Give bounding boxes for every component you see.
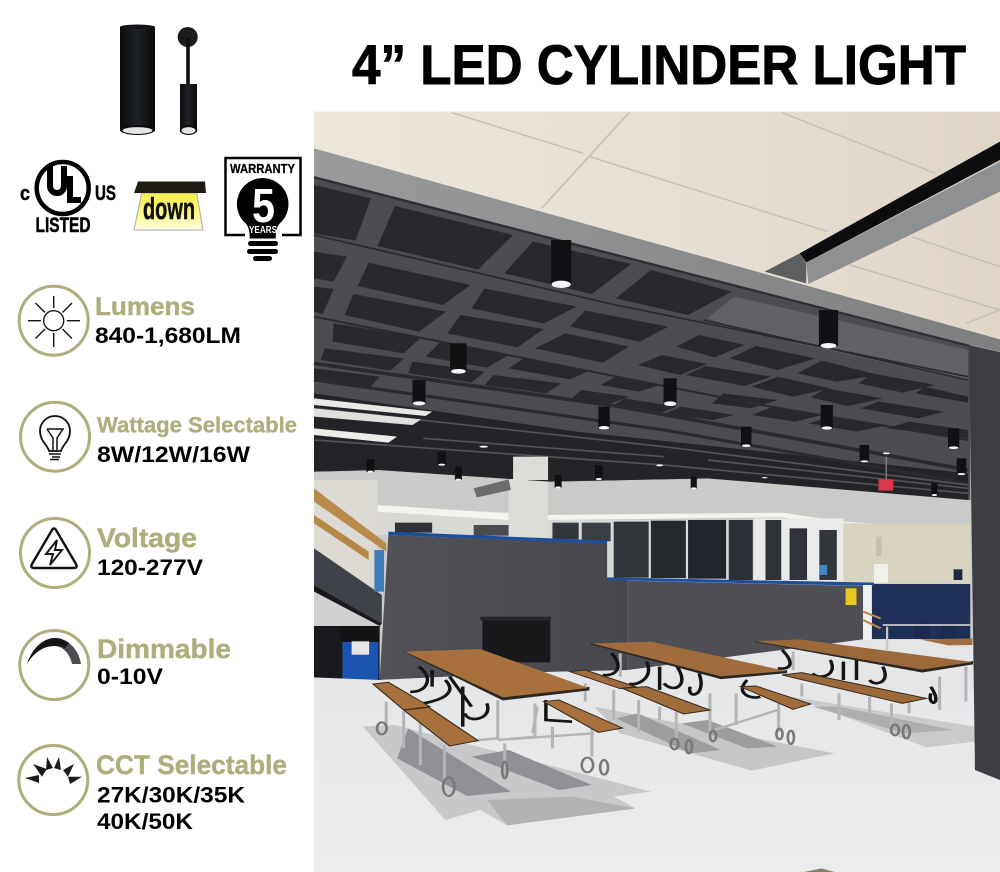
- floor shadows: [363, 725, 651, 825]
- table tops: [405, 652, 589, 700]
- spec: CCT: 40K/50K: [97, 809, 193, 834]
- warranty badge: [226, 158, 300, 261]
- lighter ribs in lower band: [314, 408, 968, 493]
- icon: high voltage triangle: [20, 518, 90, 588]
- spec: lumens: [19, 286, 241, 355]
- spec: voltage: [20, 518, 203, 588]
- left stairs: [314, 548, 382, 623]
- windows: [548, 520, 758, 581]
- spec: CCT: [19, 746, 287, 834]
- icon: light bulb: [20, 402, 90, 471]
- UL listed logo: US: [95, 182, 116, 205]
- downlight logo: down: [143, 191, 195, 226]
- blue bin: [340, 626, 380, 681]
- icon: rising sun rays: [19, 746, 88, 814]
- benches: [373, 670, 926, 746]
- navy partition: [872, 584, 970, 639]
- skylight strips: [314, 398, 432, 416]
- spec: wattage: [20, 402, 297, 471]
- coffers: [314, 185, 732, 403]
- dark lower ceiling band: [314, 393, 968, 500]
- spec: dimmable: 0-10V: [97, 664, 163, 689]
- warranty badge: WARRANTY: [230, 161, 295, 176]
- black carts: [482, 617, 550, 662]
- spec: wattage: Wattage Selectable: [97, 412, 297, 438]
- flat soffit area: [708, 297, 968, 380]
- UL listed logo: c: [20, 183, 30, 205]
- dark column: [969, 345, 1000, 780]
- spec: CCT: CCT Selectable: [96, 750, 287, 780]
- spec: lumens: 840-1,680LM: [95, 323, 241, 348]
- warranty badge: 5: [252, 180, 275, 233]
- UL listed logo: LISTED: [36, 214, 90, 237]
- main beam: [314, 148, 1000, 352]
- chairs: [914, 623, 930, 639]
- photo: cafeteria with cylinder lights: [314, 112, 1000, 872]
- cross beam: [765, 253, 806, 283]
- icon: sun: [19, 286, 88, 355]
- spec: voltage: 120-277V: [97, 555, 203, 580]
- cylinder lights: [366, 240, 966, 495]
- spec: voltage: Voltage: [97, 523, 197, 553]
- downlight logo: [134, 182, 206, 230]
- spec: wattage: 8W/12W/16W: [97, 442, 250, 467]
- spec: lumens: Lumens: [95, 293, 195, 321]
- icon: dimmer arc: [20, 630, 89, 700]
- UL listed logo: [20, 162, 116, 237]
- floor: [314, 639, 1000, 872]
- spec: CCT: 27K/30K/35K: [97, 782, 245, 808]
- ceiling zone: [314, 112, 1000, 500]
- wheels: [377, 722, 910, 796]
- pipes: [314, 235, 968, 483]
- exit sign: [878, 457, 893, 491]
- lower room scene: [314, 460, 1000, 872]
- pillar top: [513, 457, 548, 480]
- right coffers: [612, 335, 968, 438]
- warranty badge: YEARS: [249, 225, 277, 236]
- product image: surface and pendant cylinders: [120, 24, 198, 135]
- spec: dimmable: Dimmable: [97, 634, 231, 664]
- table legs and frames: [386, 652, 966, 780]
- spec: dimmable: [20, 630, 231, 700]
- gray wall: [380, 535, 627, 680]
